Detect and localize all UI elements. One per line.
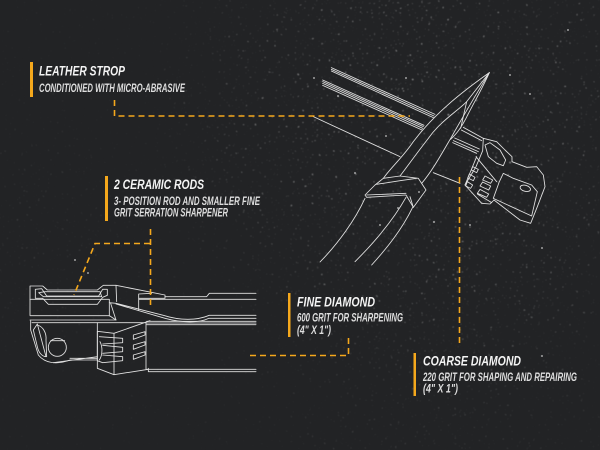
- handle with pivot: [31, 321, 97, 363]
- callout: 2 ceramic rods: [105, 176, 260, 221]
- rods upper set: [323, 68, 483, 153]
- callout: 2 ceramic rods: 2 CERAMIC RODS: [113, 177, 204, 192]
- line art: knife and sharpener (angled view): [313, 68, 545, 265]
- callout: fine diamond: (4" X 1"): [297, 325, 331, 337]
- callout: fine diamond: 600 GRIT FOR SHARPENING: [297, 312, 403, 324]
- callout: 2 ceramic rods: GRIT SERRATION SHARPENER: [114, 208, 228, 220]
- knife handle: [320, 197, 413, 265]
- leader lines: ceramic rods: [74, 229, 150, 305]
- rod lower frame: [313, 117, 460, 183]
- leader line: coarse diamond: [458, 177, 460, 344]
- leader line: leather strop: [114, 100, 410, 116]
- rod slot and top body: [30, 285, 256, 325]
- line art: sharpener (side view): [30, 285, 256, 375]
- knife blade: [383, 73, 489, 183]
- callout: coarse diamond: (4" X 1"): [423, 384, 458, 396]
- callout: leather strop: CONDITIONED WITH MICRO-ABRASIVE: [39, 83, 185, 95]
- callout: 2 ceramic rods: 3- POSITION ROD AND SMALLER FINE: [114, 196, 260, 208]
- callout: leather strop: LEATHER STROP: [39, 64, 126, 78]
- callout: leather strop: [30, 62, 185, 97]
- callout: fine diamond: FINE DIAMOND: [297, 294, 375, 310]
- grip block with vents: [97, 321, 256, 375]
- knife guard: [365, 176, 426, 207]
- callout: fine diamond: [288, 293, 403, 337]
- leader line: fine diamond: [250, 338, 348, 356]
- sharpener body: [465, 138, 545, 223]
- callout: coarse diamond: COARSE DIAMOND: [423, 354, 521, 368]
- callout: coarse diamond: [414, 353, 577, 396]
